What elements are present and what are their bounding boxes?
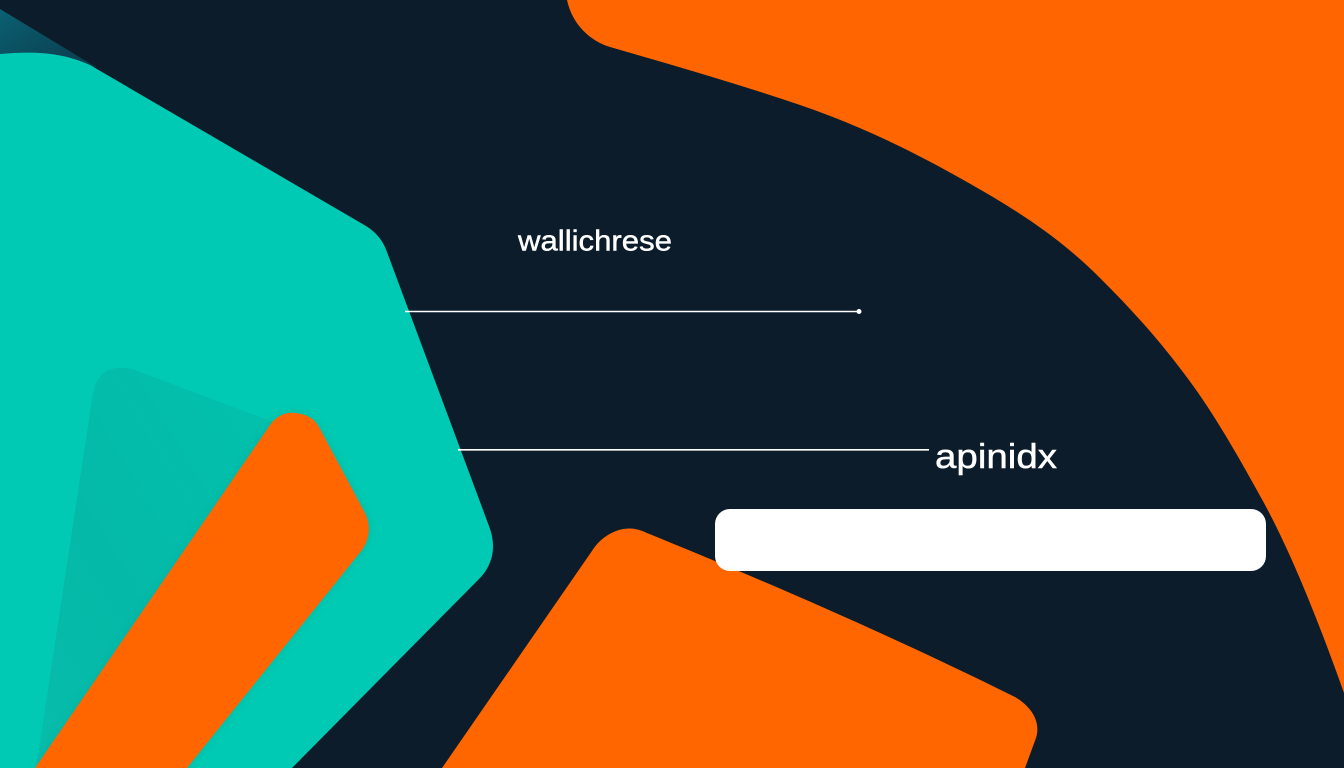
large teal polygon — [0, 53, 493, 768]
orange bar on teal — [35, 413, 369, 768]
label: apinidx: apinidx — [935, 438, 1057, 476]
inner translucent teal panel — [36, 368, 276, 768]
orange bar shadow — [35, 413, 369, 768]
label: wallichrese: wallichrese — [517, 226, 672, 258]
top right orange shape — [567, 0, 1344, 693]
white rounded bar — [715, 509, 1266, 571]
connector line upper — [405, 309, 862, 314]
connector line lower — [458, 449, 929, 451]
corner teal shape — [0, 9, 96, 67]
bottom orange shape — [442, 529, 1037, 768]
